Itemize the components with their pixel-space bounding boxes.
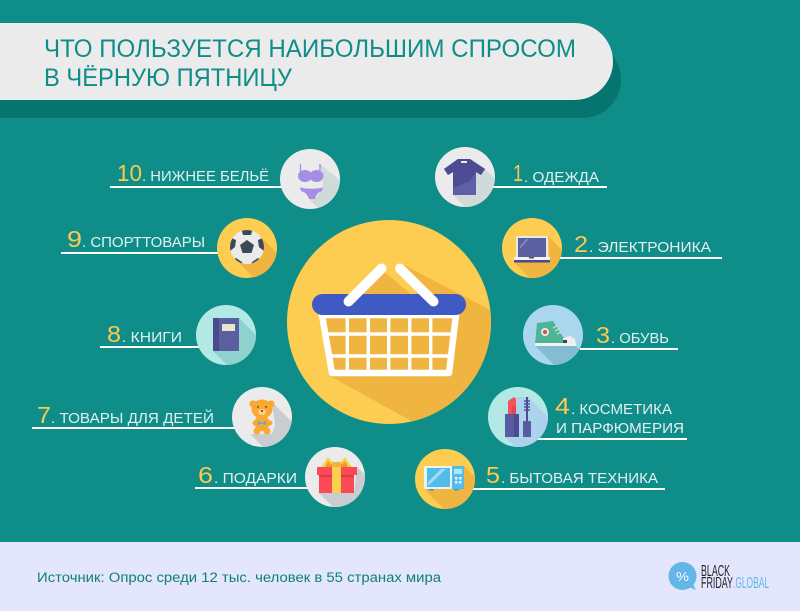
icon: laptop bbox=[502, 218, 562, 278]
label: 9. sports goods: 9 bbox=[67, 226, 82, 252]
label: 5. home appliances: . БЫТОВАЯ ТЕХНИКА bbox=[501, 470, 658, 487]
label: 8. books bbox=[107, 321, 182, 347]
label: 10. underwear bbox=[117, 160, 269, 186]
item 5: home appliances bbox=[415, 449, 665, 509]
label: 6. gifts: 6 bbox=[198, 462, 213, 488]
label: 7. kids goods bbox=[37, 402, 214, 428]
icon: lipstick and mascara bbox=[488, 387, 548, 447]
title: В ЧЁРНУЮ ПЯТНИЦУ bbox=[44, 64, 292, 92]
item 3: shoes bbox=[523, 305, 678, 365]
item 9: sports goods bbox=[61, 218, 277, 278]
label: 3. shoes: 3 bbox=[596, 322, 610, 348]
icon: lingerie bbox=[280, 149, 340, 209]
logo: Black Friday Global bbox=[668, 562, 769, 592]
central basket icon bbox=[287, 220, 491, 424]
item 2: electronics bbox=[502, 218, 722, 278]
logo: Black Friday Global: FRIDAY bbox=[701, 575, 733, 592]
label: 9. sports goods bbox=[67, 226, 205, 252]
label: 8. books: 8 bbox=[107, 321, 121, 347]
item 7: kids goods bbox=[32, 387, 292, 447]
logo: Black Friday Global: BLACK bbox=[701, 563, 730, 580]
source note: Источник: Опрос среди 12 тыс. человек в 55 странах мира bbox=[37, 570, 442, 585]
label: 6. gifts bbox=[198, 462, 297, 488]
icon: microwave bbox=[415, 449, 475, 509]
item 8: books bbox=[100, 305, 256, 365]
item 1: clothing bbox=[435, 147, 607, 207]
label: 7. kids goods: 7 bbox=[37, 402, 51, 428]
label: 6. gifts: . ПОДАРКИ bbox=[214, 470, 297, 487]
logo: Black Friday Global: .GLOBAL bbox=[733, 575, 769, 592]
label: 1. clothing bbox=[513, 160, 599, 186]
icon: t-shirt bbox=[435, 147, 495, 207]
header banner bbox=[0, 23, 621, 118]
footer band bbox=[0, 542, 800, 611]
label: 10. underwear: . НИЖНЕЕ БЕЛЬЁ bbox=[142, 168, 269, 185]
label: 10. underwear: 10 bbox=[117, 160, 142, 186]
title: ЧТО ПОЛЬЗУЕТСЯ НАИБОЛЬШИМ СПРОСОМ bbox=[44, 35, 576, 63]
item 10: underwear bbox=[110, 149, 340, 209]
label: 2. electronics bbox=[574, 231, 711, 257]
label: 2. electronics: 2 bbox=[574, 231, 588, 257]
label: 7. kids goods: . ТОВАРЫ ДЛЯ ДЕТЕЙ bbox=[51, 409, 214, 427]
label: 4. cosmetics and perfumery: . КОСМЕТИКА bbox=[571, 401, 672, 418]
label: 1. clothing: . ОДЕЖДА bbox=[524, 169, 599, 186]
label: 8. books: . КНИГИ bbox=[122, 329, 182, 346]
icon: soccer ball bbox=[217, 218, 277, 278]
label: 5. home appliances: 5 bbox=[486, 462, 500, 488]
label: 3. shoes: . ОБУВЬ bbox=[611, 330, 669, 347]
label: 4. cosmetics and perfumery: И ПАРФЮМЕРИЯ bbox=[556, 420, 684, 437]
logo: Black Friday Global: % bbox=[676, 569, 689, 584]
label: 3. shoes bbox=[596, 322, 669, 348]
label: 2. electronics: . ЭЛЕКТРОНИКА bbox=[589, 239, 711, 256]
item 6: gifts bbox=[195, 447, 365, 507]
icon: gift box bbox=[305, 447, 365, 507]
title bbox=[44, 35, 576, 92]
label: 4. cosmetics and perfumery bbox=[555, 393, 684, 437]
icon: teddy bear bbox=[232, 387, 292, 447]
label: 5. home appliances bbox=[486, 462, 658, 488]
label: 1. clothing: 1 bbox=[513, 160, 523, 186]
icon: book bbox=[196, 305, 256, 365]
label: 4. cosmetics and perfumery: 4 bbox=[555, 393, 570, 419]
icon: sneaker bbox=[523, 305, 583, 365]
label: 9. sports goods: . СПОРТТОВАРЫ bbox=[82, 234, 205, 251]
item 4: cosmetics bbox=[488, 387, 687, 447]
